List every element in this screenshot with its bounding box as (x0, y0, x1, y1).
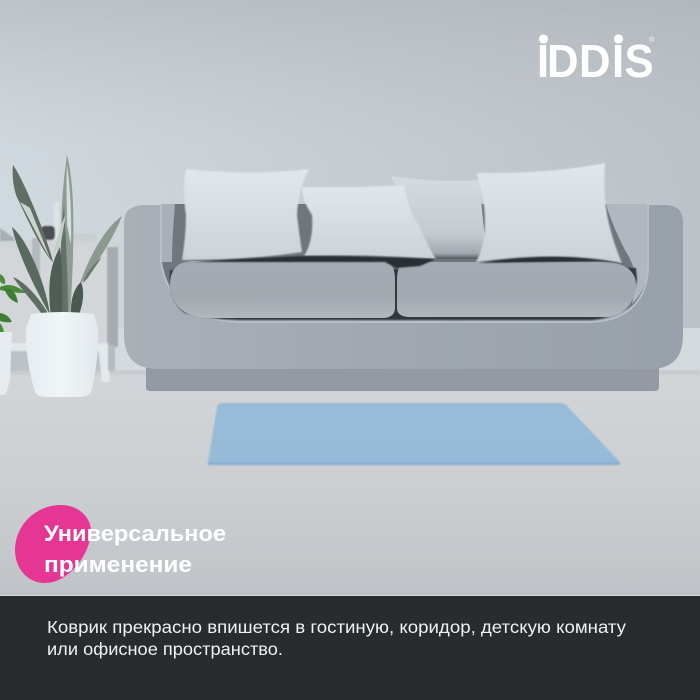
sofa (124, 163, 683, 391)
shadow under cushions (170, 268, 637, 320)
back pillow (391, 176, 487, 259)
heading: Универсальное (44, 521, 226, 546)
logo: IDDIS (537, 35, 654, 87)
sofa base (146, 365, 659, 391)
icon: plant leaves (12, 155, 122, 317)
cabinet (0, 202, 118, 382)
mid left leaf (12, 227, 50, 315)
icon: small plant on the left (0, 274, 26, 395)
right seat cushion (397, 262, 636, 317)
pillow 1 (182, 169, 309, 260)
heading: применение (44, 552, 192, 577)
pillow 4 (476, 163, 622, 263)
icon: white plant pot (26, 312, 98, 397)
body text: Коврик прекрасно впишется в гостиную, коридор, детскую комнату (47, 617, 626, 637)
wall (0, 0, 700, 330)
rug (208, 403, 620, 465)
inner short leaf (71, 282, 83, 317)
right long leaf (80, 216, 122, 283)
sofa inner back (161, 204, 648, 316)
lower left leaf (13, 277, 50, 317)
pink blob (15, 505, 91, 583)
left seat cushion (170, 261, 395, 318)
bottom band (0, 595, 700, 700)
sofa body (124, 205, 683, 369)
pillow 2 (302, 185, 436, 259)
body text: или офисное пространство. (47, 639, 283, 659)
tall centre leaf (61, 155, 73, 317)
logo: ® (649, 36, 655, 44)
tall left leaf (13, 165, 53, 262)
right arm inner panel (606, 204, 648, 304)
dark shadow under pillows (178, 256, 625, 268)
baseboard (0, 328, 700, 372)
sofa trim line (161, 204, 648, 322)
floor (0, 370, 700, 596)
inner wide leaf (49, 247, 62, 317)
